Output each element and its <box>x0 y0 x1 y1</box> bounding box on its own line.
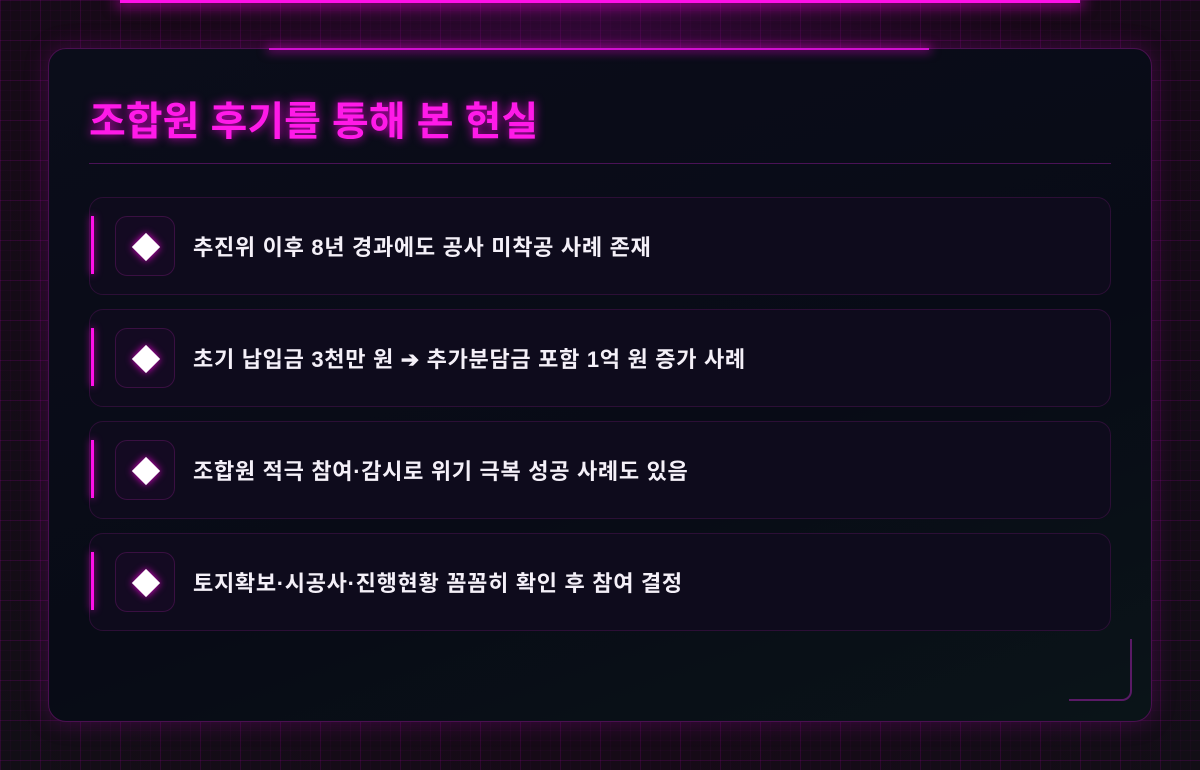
text 2: 초기 납입금 3천만 원 ➔ 추가분담금 포함 1억 원 증가 사례 <box>193 347 746 372</box>
corner bracket <box>1069 639 1132 701</box>
icon: diamond <box>115 216 175 276</box>
icon: diamond <box>115 552 175 612</box>
icon: diamond <box>115 440 175 500</box>
item 1 <box>89 197 1111 295</box>
item 2 <box>89 309 1111 407</box>
icon: diamond <box>115 328 175 388</box>
text 1: 추진위 이후 8년 경과에도 공사 미착공 사례 존재 <box>193 235 651 260</box>
title: 조합원 후기를 통해 본 현실 <box>89 100 538 144</box>
item 4 <box>89 533 1111 631</box>
text 3: 조합원 적극 참여·감시로 위기 극복 성공 사례도 있음 <box>193 459 688 484</box>
text 4: 토지확보·시공사·진행현황 꼼꼼히 확인 후 참여 결정 <box>193 571 683 596</box>
item 3 <box>89 421 1111 519</box>
